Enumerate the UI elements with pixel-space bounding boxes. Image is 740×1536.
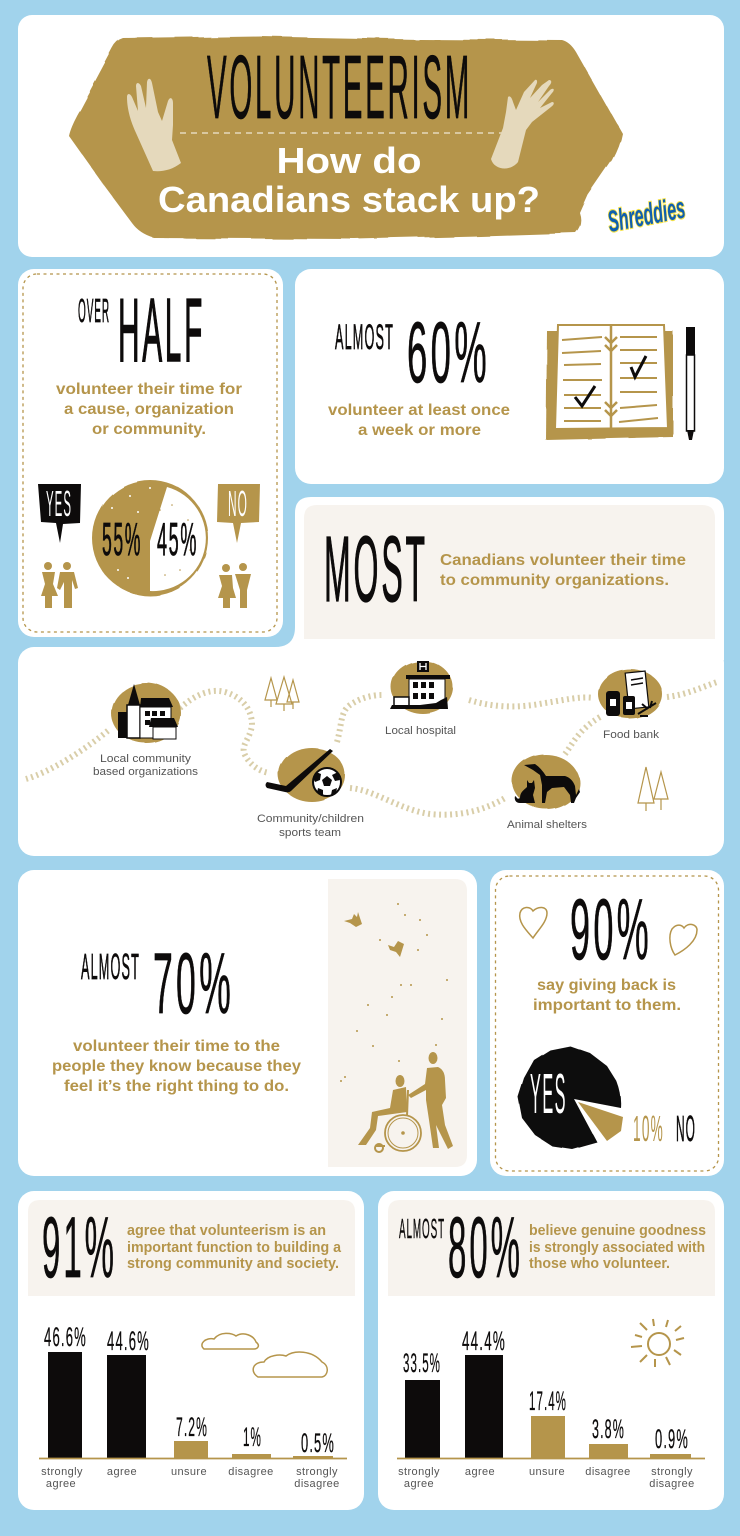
dotted trail <box>26 682 717 815</box>
panel: title banner <box>18 15 724 257</box>
text: description: is strongly associated with <box>529 1240 705 1256</box>
panel: almost 60 percent: ALMOST <box>335 318 394 357</box>
bar chart: agreement: 46.6% <box>44 1322 87 1352</box>
text: description: agree that volunteerism is an <box>127 1223 326 1239</box>
label: sports team <box>257 813 364 839</box>
panel: almost 80 percent: 80% <box>448 1200 523 1296</box>
icon: wheelchair carer <box>358 1052 453 1152</box>
icon: pen <box>686 327 695 440</box>
icon: clouds <box>202 1333 327 1377</box>
text: description <box>440 552 686 589</box>
label: local hospital: Local hospital <box>385 725 456 737</box>
heading: how do: How do <box>276 140 422 181</box>
bar chart: goodness: strongly <box>651 1466 693 1478</box>
text: description: important to them. <box>533 997 681 1014</box>
icon: no people <box>218 563 251 608</box>
bar chart: agreement: 7.2% <box>176 1412 208 1442</box>
bar chart: agreement: 1% <box>243 1422 262 1452</box>
text: description: volunteer their time for <box>56 381 242 398</box>
text: description: Canadians volunteer their time <box>440 552 686 569</box>
text: description: believe genuine goodness <box>529 1223 706 1239</box>
icon: yes people <box>41 562 78 608</box>
bar chart: agreement: 44.6% <box>107 1326 150 1356</box>
heading: canadians stack up: Canadians stack up? <box>158 179 540 220</box>
bar chart: goodness: 44.4% <box>462 1326 506 1356</box>
bar chart: goodness: disagree <box>585 1466 631 1478</box>
divider line <box>180 132 502 134</box>
panel: 91 percent <box>18 1191 364 1510</box>
label: sports team: sports team <box>279 827 341 839</box>
bar chart: goodness: agree <box>404 1478 434 1490</box>
panel: 90 percent <box>490 870 724 1176</box>
icon: hospital <box>390 661 453 713</box>
pie chart: 90 yes 10 no: YES <box>530 1062 567 1126</box>
label: sports team: Community/children <box>257 813 364 825</box>
label: food bank: Food bank <box>603 729 660 741</box>
bar chart: goodness: 33.5% <box>403 1348 441 1378</box>
icon: birds <box>344 912 404 957</box>
pie chart: 55 yes 45 no: 55% <box>102 513 142 565</box>
panel: 90 percent: NO <box>676 1108 696 1149</box>
panel: over half <box>18 269 283 637</box>
icon: sun <box>631 1319 684 1367</box>
text: description: strong community and society. <box>127 1256 339 1272</box>
bar chart: goodness: agree <box>465 1466 495 1478</box>
icon: trees top <box>265 677 299 711</box>
panel: most <box>295 497 724 660</box>
label: local community <box>93 753 199 778</box>
text: description: important function to building a <box>127 1240 342 1256</box>
icon: left hand <box>127 79 181 171</box>
label: local community: Local community <box>100 753 192 765</box>
text: description <box>56 381 242 438</box>
bar chart: goodness: unsure <box>529 1466 565 1478</box>
icon: right hand <box>491 80 554 168</box>
panel: almost 80 percent: ALMOST <box>399 1213 445 1244</box>
panel: almost 80 percent <box>378 1191 724 1510</box>
bar chart: goodness: 0.9% <box>655 1424 689 1454</box>
text: description <box>533 977 681 1014</box>
text: description: a week or more <box>358 422 481 439</box>
text: description: to community organizations. <box>440 572 669 589</box>
text: description <box>127 1223 342 1272</box>
bar chart: agreement: agree <box>46 1478 76 1490</box>
text: description: feel it’s the right thing to do. <box>64 1078 289 1095</box>
bar chart: agreement: disagree <box>294 1478 340 1490</box>
icon: food bank <box>598 669 662 719</box>
label: local community: based organizations <box>93 766 199 778</box>
text: description: a cause, organization <box>64 401 234 418</box>
bar chart: agreement: 0.5% <box>301 1428 335 1458</box>
text: description: volunteer at least once <box>328 402 510 419</box>
icon: no speech bubble <box>217 483 260 543</box>
bar chart: goodness: 17.4% <box>529 1386 567 1416</box>
panel: over half: OVER <box>78 292 110 329</box>
bar chart: goodness: strongly <box>398 1466 440 1478</box>
bar chart: agreement <box>39 1322 347 1490</box>
icon: heart left <box>520 907 547 938</box>
panel: almost 70 percent: ALMOST <box>81 946 140 987</box>
icon: heart right <box>670 924 697 955</box>
icon: animals <box>513 755 580 809</box>
text: description: people they know because they <box>52 1058 301 1075</box>
panel: almost 60 percent <box>295 269 724 484</box>
text: description <box>52 1038 301 1095</box>
panel: community map <box>18 627 724 856</box>
panel: almost 70 percent: 70% <box>153 936 234 1032</box>
icon: yes speech bubble <box>38 483 81 543</box>
icon: book <box>546 324 673 440</box>
pie chart: 90 yes 10 no <box>518 1046 696 1149</box>
panel: over half: 45% <box>157 513 198 565</box>
bar chart: agreement: disagree <box>228 1466 274 1478</box>
icon: no speech bubble: NO <box>228 483 248 524</box>
bar chart: goodness: 3.8% <box>592 1414 625 1444</box>
label: animal shelters: Animal shelters <box>507 819 588 831</box>
text: description: or community. <box>92 421 206 438</box>
bar chart: agreement: unsure <box>171 1466 207 1478</box>
panel: almost 60 percent: 60% <box>407 305 490 401</box>
icon: community buildings <box>111 683 181 743</box>
bar chart: goodness <box>397 1326 705 1490</box>
panel: almost 70 percent <box>18 870 477 1176</box>
text: description: volunteer their time to the <box>73 1038 280 1055</box>
icon: trees bottom <box>638 767 668 811</box>
text: description <box>328 402 510 439</box>
bar chart: goodness: disagree <box>649 1478 695 1490</box>
panel: over half: HALF <box>118 281 205 381</box>
text: description: those who volunteer. <box>529 1256 670 1272</box>
panel: 91 percent: 91% <box>42 1200 117 1296</box>
panel: over half: YES <box>46 483 72 524</box>
bar chart: agreement: strongly <box>296 1466 338 1478</box>
pie chart: 55 yes 45 no <box>92 480 208 596</box>
decoration: speckles <box>340 903 448 1082</box>
banner shape <box>68 36 622 239</box>
illustration background <box>328 879 467 1167</box>
text: description <box>529 1223 706 1272</box>
text: description: say giving back is <box>537 977 676 994</box>
icon: hockey stick and soccer ball <box>266 748 345 802</box>
bar chart: agreement: agree <box>107 1466 137 1478</box>
panel: most: MOST <box>324 517 428 621</box>
bar chart: agreement: strongly <box>41 1466 83 1478</box>
pie chart: 90 yes 10 no: 10% <box>633 1108 664 1149</box>
